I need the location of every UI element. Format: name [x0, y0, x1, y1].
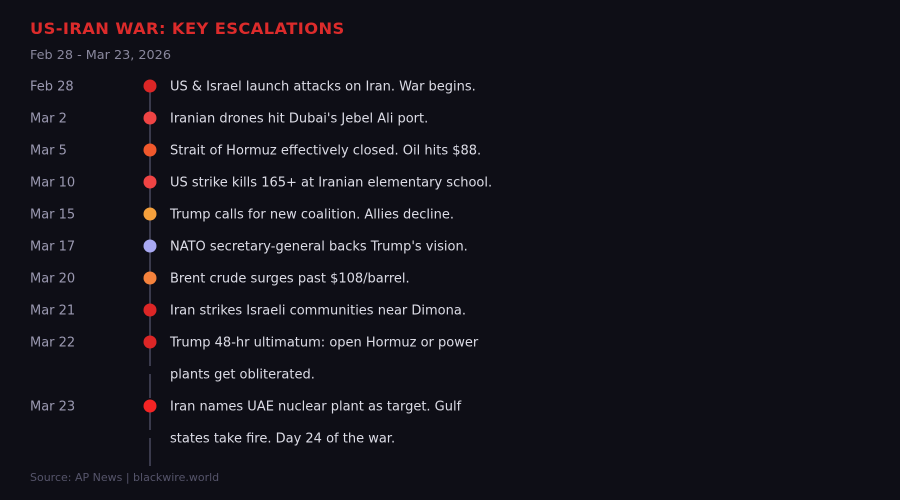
event: Mar 22: Mar 22	[30, 336, 75, 350]
event: Mar 5	[30, 144, 481, 158]
timeline line segments	[149, 86, 151, 466]
event: Feb 28: Feb 28	[30, 80, 74, 94]
event: Mar 22: plants get obliterated.	[170, 368, 315, 382]
source footer: Source: AP News | blackwire.world	[30, 471, 219, 484]
event: Mar 15	[30, 208, 454, 222]
event: Mar 17	[30, 240, 468, 254]
event: Mar 15: Mar 15	[30, 208, 75, 222]
event: Mar 10: Mar 10	[30, 176, 75, 190]
event: Mar 22: Trump 48-hr ultimatum: open Hormuz or power	[169, 336, 479, 350]
event: Mar 10	[30, 176, 492, 190]
event: Mar 23: states take fire. Day 24 of the war.	[170, 432, 395, 446]
event: Mar 21: Iran strikes Israeli communities near Dimona.	[170, 304, 466, 318]
event: Mar 17: Mar 17	[30, 240, 75, 254]
event: Mar 10: US strike kills 165+ at Iranian elementary school.	[170, 176, 492, 190]
timeline events	[30, 80, 492, 446]
event: Mar 20	[30, 272, 410, 286]
event: Mar 23: Mar 23	[30, 400, 75, 414]
event: Mar 23	[30, 400, 462, 446]
subtitle: Feb 28 - Mar 23, 2026	[30, 48, 171, 63]
event: Mar 22	[30, 336, 479, 382]
event: Mar 2	[30, 112, 428, 126]
event: Mar 2: Mar 2	[30, 112, 67, 126]
title: US-IRAN WAR: KEY ESCALATIONS	[30, 19, 345, 38]
event: Mar 2: Iranian drones hit Dubai's Jebel Ali port.	[170, 112, 428, 126]
event: Mar 20: Brent crude surges past $108/barrel.	[170, 272, 410, 286]
event: Mar 17: NATO secretary-general backs Trump's vision.	[170, 240, 468, 254]
event: Mar 15: Trump calls for new coalition. Allies decline.	[169, 208, 454, 222]
event: Mar 5: Strait of Hormuz effectively closed. Oil hits $88.	[170, 144, 481, 158]
event: Mar 23: Iran names UAE nuclear plant as target. Gulf	[170, 400, 462, 414]
event: Mar 21	[30, 304, 466, 318]
event: Mar 20: Mar 20	[30, 272, 75, 286]
event: Feb 28	[30, 80, 476, 94]
event: Mar 21: Mar 21	[30, 304, 75, 318]
event: Feb 28: US & Israel launch attacks on Iran. War begins.	[170, 80, 476, 94]
event: Mar 5: Mar 5	[30, 144, 67, 158]
